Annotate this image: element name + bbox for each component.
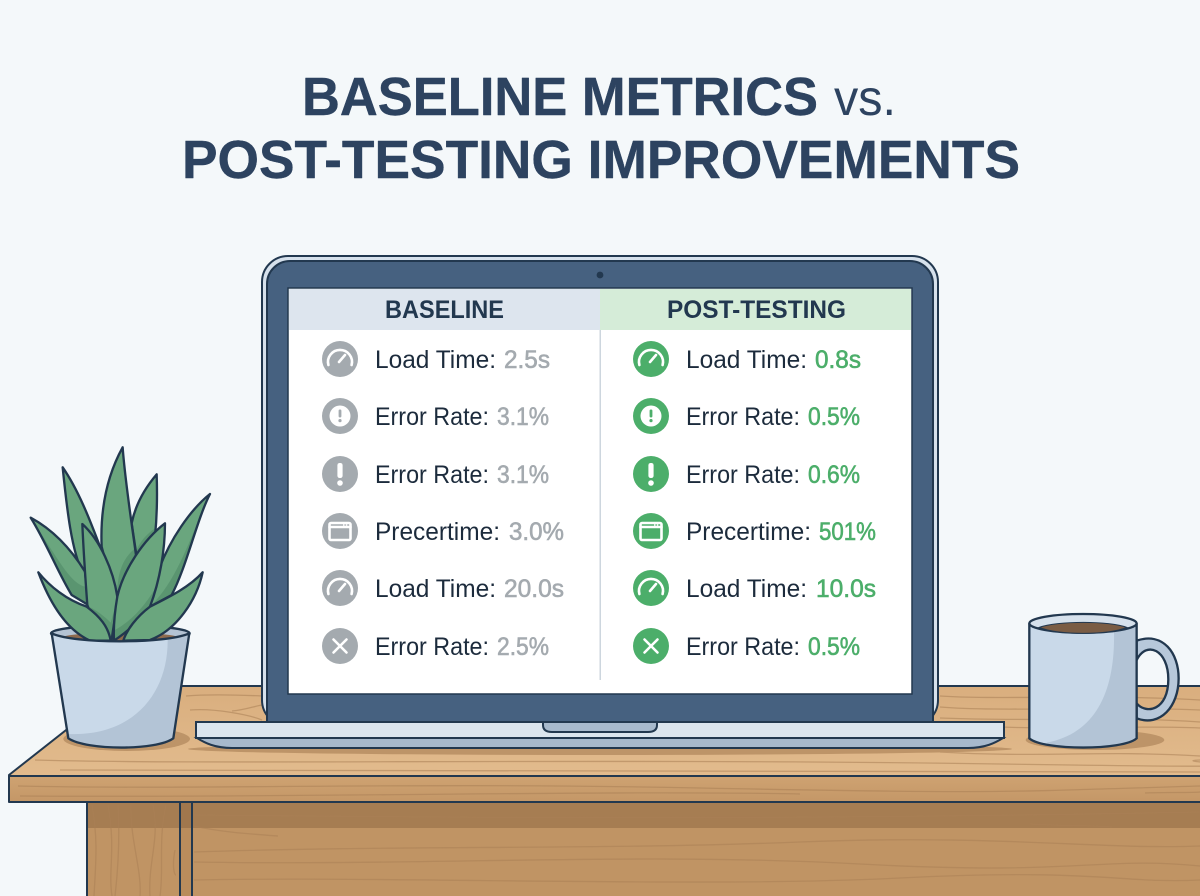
row: load time baseline second: Load Time: — [375, 575, 496, 603]
row: load time post second: 10.0s — [816, 575, 876, 603]
desk front edge — [9, 775, 1200, 802]
laptop — [188, 256, 1012, 755]
row: load time post — [633, 341, 861, 377]
laptop bezel — [267, 261, 933, 724]
row: error rate baseline second — [322, 456, 549, 492]
column divider — [600, 330, 601, 680]
screen — [288, 288, 912, 694]
post-testing header — [600, 289, 911, 330]
row: error rate post third — [633, 628, 860, 664]
row: precertime baseline: 3.0% — [509, 518, 564, 546]
row: precertime post: 501% — [819, 518, 876, 546]
row: error rate post — [633, 398, 860, 434]
coffee mug — [1026, 614, 1179, 750]
icon: gauge — [633, 570, 669, 606]
row: error rate post second — [633, 456, 860, 492]
icon: alert circle — [633, 398, 669, 434]
desk top surface — [9, 686, 1200, 775]
row: load time post second: Load Time: — [686, 575, 807, 603]
row: error rate baseline second: Error Rate: — [375, 461, 489, 489]
baseline header: BASELINE — [385, 296, 504, 324]
coffee — [1039, 622, 1127, 633]
icon: gauge — [633, 341, 669, 377]
icon: exclamation — [322, 456, 358, 492]
icon: cross — [633, 628, 669, 664]
row: error rate baseline third: Error Rate: — [375, 633, 489, 661]
row: error rate baseline third: 2.5% — [497, 633, 549, 661]
baseline header — [289, 289, 600, 330]
row: load time post: 0.8s — [815, 346, 861, 374]
row: load time baseline: Load Time: — [375, 346, 496, 374]
pot shadow — [63, 727, 190, 751]
icon: browser window — [322, 513, 358, 549]
baseline column — [289, 289, 600, 664]
icon: alert circle — [322, 398, 358, 434]
title: BASELINE METRICS — [302, 67, 818, 127]
plant pot body — [52, 633, 189, 748]
icon: gauge — [322, 341, 358, 377]
laptop lid — [262, 256, 938, 726]
row: error rate post second: Error Rate: — [686, 461, 800, 489]
desk legs and drawer — [87, 802, 1200, 896]
camera — [597, 272, 603, 278]
row: error rate post second: 0.6% — [808, 461, 860, 489]
base shadow — [188, 743, 1012, 755]
title: POST-TESTING IMPROVEMENTS — [182, 130, 1020, 190]
mug shadow — [1026, 730, 1164, 750]
icon: cross — [322, 628, 358, 664]
row: precertime baseline: Precertime: — [375, 518, 500, 546]
row: error rate post third: Error Rate: — [686, 633, 800, 661]
icon: gauge — [322, 570, 358, 606]
post-testing column — [600, 289, 911, 664]
row: error rate baseline: 3.1% — [497, 403, 549, 431]
row: load time post second — [633, 570, 876, 606]
post-testing header: POST-TESTING — [667, 296, 846, 324]
row: error rate baseline — [322, 398, 549, 434]
row: load time baseline: 2.5s — [504, 346, 550, 374]
desk — [9, 686, 1200, 896]
row: load time baseline — [322, 341, 550, 377]
row: precertime baseline — [322, 513, 564, 549]
row: error rate baseline third — [322, 628, 549, 664]
row: load time baseline second — [322, 570, 564, 606]
icon: exclamation — [633, 456, 669, 492]
title: vs. — [834, 70, 896, 126]
row: error rate post: 0.5% — [808, 403, 860, 431]
plant — [31, 447, 210, 751]
plant pot rim and soil — [51, 625, 190, 642]
title — [182, 67, 1020, 190]
row: error rate post third: 0.5% — [808, 633, 860, 661]
row: precertime post: Precertime: — [686, 518, 811, 546]
laptop base — [196, 722, 1004, 748]
row: error rate baseline second: 3.1% — [497, 461, 549, 489]
row: error rate baseline: Error Rate: — [375, 403, 489, 431]
row: load time baseline second: 20.0s — [504, 575, 564, 603]
row: precertime post — [633, 513, 876, 549]
plant leaves — [31, 447, 210, 641]
row: load time post: Load Time: — [686, 346, 807, 374]
mug handle — [1137, 639, 1179, 720]
mug body — [1029, 614, 1137, 748]
icon: browser window — [633, 513, 669, 549]
row: error rate post: Error Rate: — [686, 403, 800, 431]
